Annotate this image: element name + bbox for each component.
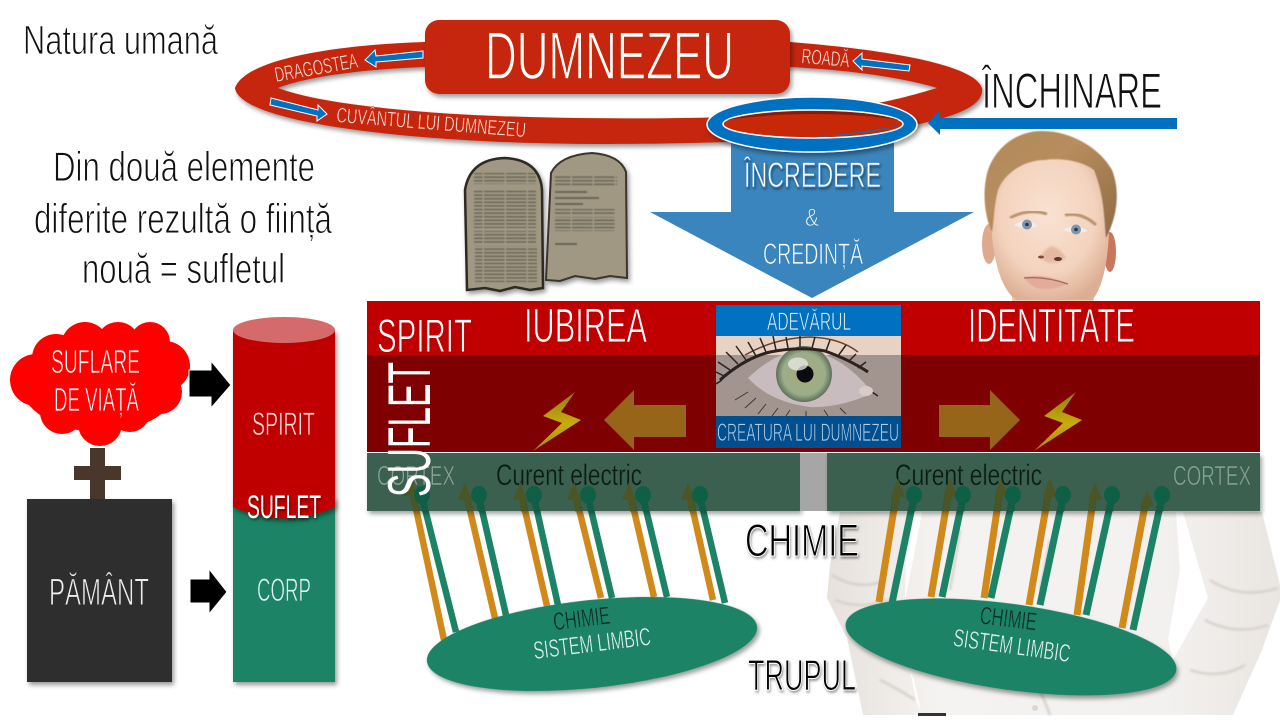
shirt folds	[832, 530, 1278, 715]
heading: IDENTITATE: IDENTITATE	[968, 300, 1135, 353]
label: SUFLARE: SUFLARE	[51, 343, 140, 380]
heading: IUBIREA: IUBIREA	[524, 300, 647, 353]
chart: left nerve lines	[412, 490, 725, 640]
icon: breath of life cloud	[10, 322, 190, 446]
face	[991, 152, 1109, 300]
heading: ÎNCHINARE: ÎNCHINARE	[981, 63, 1162, 119]
label: Curent electric right: Curent electric	[895, 459, 1042, 492]
chart: cylinder of spirit soul body	[233, 317, 335, 682]
panel: cortex band	[367, 453, 1260, 511]
box: PĂMÂNT	[27, 499, 172, 682]
box: DUMNEZEU: DUMNEZEU	[485, 18, 734, 94]
label: SUFLET: SUFLET	[247, 489, 321, 525]
arrow: worship	[928, 110, 1177, 135]
label: DE VIAȚĂ: DE VIAȚĂ	[54, 381, 139, 418]
icon: stone tablets	[465, 153, 627, 291]
mouth	[1024, 276, 1068, 289]
label: SUFLET vertical: SUFLET	[376, 362, 443, 497]
arrow: breath to spirit	[189, 361, 231, 408]
panel: truth and eye	[716, 305, 901, 448]
panel: God ring	[235, 18, 982, 144]
arrow: trust and faith	[650, 140, 974, 298]
label: CORTEX left: CORTEX	[377, 460, 455, 491]
ears	[982, 224, 996, 264]
eyelid lash line	[720, 349, 868, 380]
label: CHIMIE left: CHIMIE	[552, 602, 612, 636]
label: ROADĂ: ROADĂ	[801, 45, 850, 72]
icon: halo ring	[707, 97, 917, 152]
heading: TRUPUL: TRUPUL	[748, 651, 856, 700]
label: CUVÂNTUL LUI DUMNEZEU: CUVÂNTUL LUI DUMNEZEU	[336, 104, 527, 142]
icon: plus	[74, 448, 121, 499]
heading: CHIMIE: CHIMIE	[745, 515, 859, 566]
chart: right nerve lines	[879, 490, 1162, 630]
hair	[985, 131, 1117, 238]
belt	[918, 713, 946, 716]
label: CREATURA LUI DUMNEZEU: CREATURA LUI DUMNEZEU	[717, 419, 899, 447]
panel: limbic system left	[422, 583, 762, 705]
photo: man's head	[982, 131, 1117, 302]
label: SISTEM LIMBIC left: SISTEM LIMBIC	[532, 623, 652, 665]
label: ÎNCREDERE: ÎNCREDERE	[743, 156, 881, 195]
panel: spirit and soul band	[367, 300, 1260, 452]
label: SISTEM LIMBIC right: SISTEM LIMBIC	[951, 624, 1072, 668]
eyes	[1010, 212, 1096, 234]
label: Curent electric left: Curent electric	[496, 459, 642, 492]
panel: limbic system right	[840, 581, 1182, 713]
label: CREDINȚĂ: CREDINȚĂ	[763, 238, 863, 271]
icon: synapse arrowheads and dots	[404, 477, 1170, 511]
label: SPIRIT: SPIRIT	[377, 309, 472, 362]
shirt button	[1032, 705, 1038, 711]
arrow: dragostea	[365, 50, 423, 67]
label: SPIRIT: SPIRIT	[252, 406, 315, 442]
arm gaps	[1168, 512, 1208, 660]
label: CHIMIE right: CHIMIE	[978, 602, 1038, 636]
nose	[1038, 246, 1066, 263]
text block: definition	[34, 143, 332, 292]
neck	[1012, 280, 1094, 302]
title: Natura umană	[23, 17, 218, 63]
arrow: roadă	[853, 53, 910, 71]
box: DUMNEZEU	[425, 18, 790, 94]
box: PĂMÂNT: PĂMÂNT	[49, 571, 149, 614]
photo: man's shirt	[827, 512, 1280, 716]
icon: lightning left	[533, 392, 581, 451]
text block: definition: Din două elemente	[53, 143, 315, 190]
label: CORP: CORP	[257, 572, 311, 608]
text block: definition: nouă = sufletul	[82, 245, 285, 292]
icon: eye	[716, 336, 878, 416]
icon: lightning right	[1034, 392, 1082, 451]
text block: definition: diferite rezultă o ființă	[34, 195, 332, 242]
label: DRAGOSTEA: DRAGOSTEA	[273, 50, 360, 87]
arrow: earth to body	[190, 569, 227, 614]
red ring	[235, 42, 982, 144]
label: ADEVĂRUL: ADEVĂRUL	[767, 307, 851, 336]
label: ampersand: &	[805, 204, 819, 232]
arrow: cuvântul	[270, 98, 327, 121]
arrow: right	[939, 390, 1020, 450]
arrow: left	[604, 390, 686, 450]
